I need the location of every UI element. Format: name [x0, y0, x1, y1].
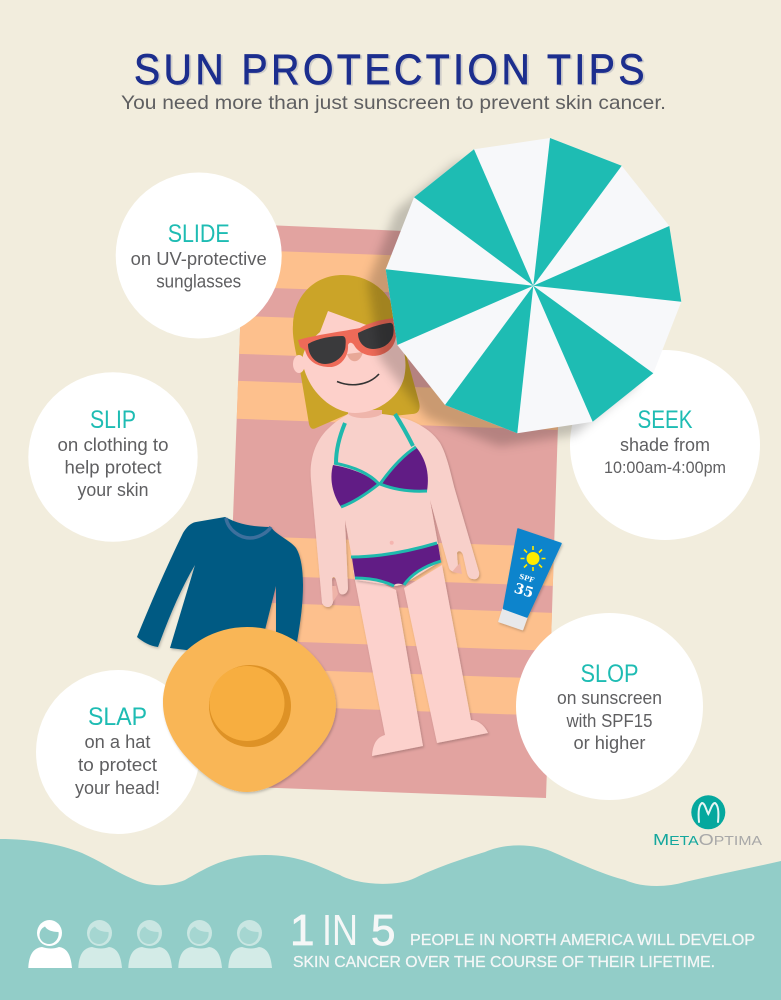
- text: slap description: your head!: [75, 778, 160, 798]
- smile: [337, 374, 379, 385]
- text: seek description: [604, 435, 726, 477]
- sunscreen tube: [499, 529, 561, 630]
- finger shadow: [332, 563, 462, 602]
- umbrella shadow: [368, 151, 663, 446]
- beach umbrella: [386, 138, 681, 433]
- statistic: 1 in 5: IN: [322, 906, 358, 955]
- text: slip description: [58, 435, 168, 500]
- text: slap description: to protect: [78, 755, 157, 775]
- sunglasses: [298, 318, 397, 367]
- people icons: 1 in 5: [28, 920, 272, 968]
- footer wave: [0, 839, 781, 1000]
- spf label: SPF: [518, 572, 535, 585]
- person 2: [78, 920, 122, 968]
- person highlighted: [28, 920, 72, 968]
- text: slop description: [557, 688, 662, 753]
- subtitle: You need more than just sunscreen to prevent skin cancer.: [121, 92, 666, 114]
- nose: [347, 352, 363, 361]
- ear: [293, 355, 305, 373]
- logo wordmark: META OPTIMA: [653, 832, 762, 849]
- tube cap: [499, 609, 527, 630]
- woman sunbathing: [293, 275, 488, 756]
- hat: [163, 627, 336, 792]
- neck: [348, 410, 382, 418]
- text: slap description: [75, 732, 160, 798]
- sun icon: [520, 546, 546, 571]
- callout: slap: [36, 670, 200, 834]
- statistic text: SKIN CANCER OVER THE COURSE OF THEIR LIFETIME.: [293, 954, 715, 971]
- statistic: 1 in 5: [290, 906, 395, 955]
- text: slip description: your skin: [78, 480, 148, 500]
- text: seek description: 10:00am-4:00pm: [604, 458, 726, 477]
- text: slide description: [131, 249, 267, 292]
- callout: slip: [28, 372, 198, 542]
- statistic text: PEOPLE IN NORTH AMERICA WILL DEVELOP: [410, 932, 755, 949]
- face: [303, 311, 406, 413]
- heading: slip: SLIP: [90, 406, 136, 434]
- hair: [293, 275, 420, 429]
- heading: slap: SLAP: [88, 703, 147, 731]
- bikini bottom: [351, 543, 441, 586]
- heading: slop: SLOP: [580, 660, 638, 688]
- statistic text: [293, 932, 755, 971]
- beach towel: [232, 226, 558, 798]
- person 5: [228, 920, 272, 968]
- spf number: 35: [512, 581, 535, 602]
- text: slide description: sunglasses: [156, 272, 241, 292]
- title: SUN PROTECTION TIPS: [134, 45, 645, 93]
- callout: seek: [570, 350, 760, 540]
- bikini top: [331, 414, 428, 507]
- callout: slop: [516, 613, 703, 800]
- navel: [390, 541, 394, 545]
- heading: seek: SEEK: [638, 406, 693, 434]
- hat crown: [210, 666, 284, 741]
- text: slop description: with SPF15: [566, 711, 652, 731]
- heading: slide: SLIDE: [168, 220, 230, 248]
- text: slop description: or higher: [574, 733, 646, 753]
- text: slip description: on clothing to: [58, 435, 168, 455]
- person 4: [178, 920, 222, 968]
- text: slap description: on a hat: [84, 732, 150, 752]
- shirt: [137, 517, 303, 660]
- tube body: [504, 529, 561, 617]
- text: seek description: shade from: [620, 435, 710, 455]
- statistic: 1 in 5: 5: [371, 906, 395, 955]
- text: slip description: help protect: [64, 458, 162, 478]
- logo: metaoptima: [653, 795, 762, 849]
- shirt collar: [226, 518, 271, 538]
- hat band: [209, 665, 291, 747]
- text: slide description: on UV-protective: [131, 249, 267, 269]
- torso and arms: [311, 414, 479, 607]
- statistic: 1 in 5: 1: [290, 906, 314, 955]
- text: slop description: on sunscreen: [557, 688, 662, 708]
- legs: [353, 565, 488, 756]
- person 3: [128, 920, 172, 968]
- callout: slide: [116, 172, 282, 338]
- logo mark: [691, 795, 725, 829]
